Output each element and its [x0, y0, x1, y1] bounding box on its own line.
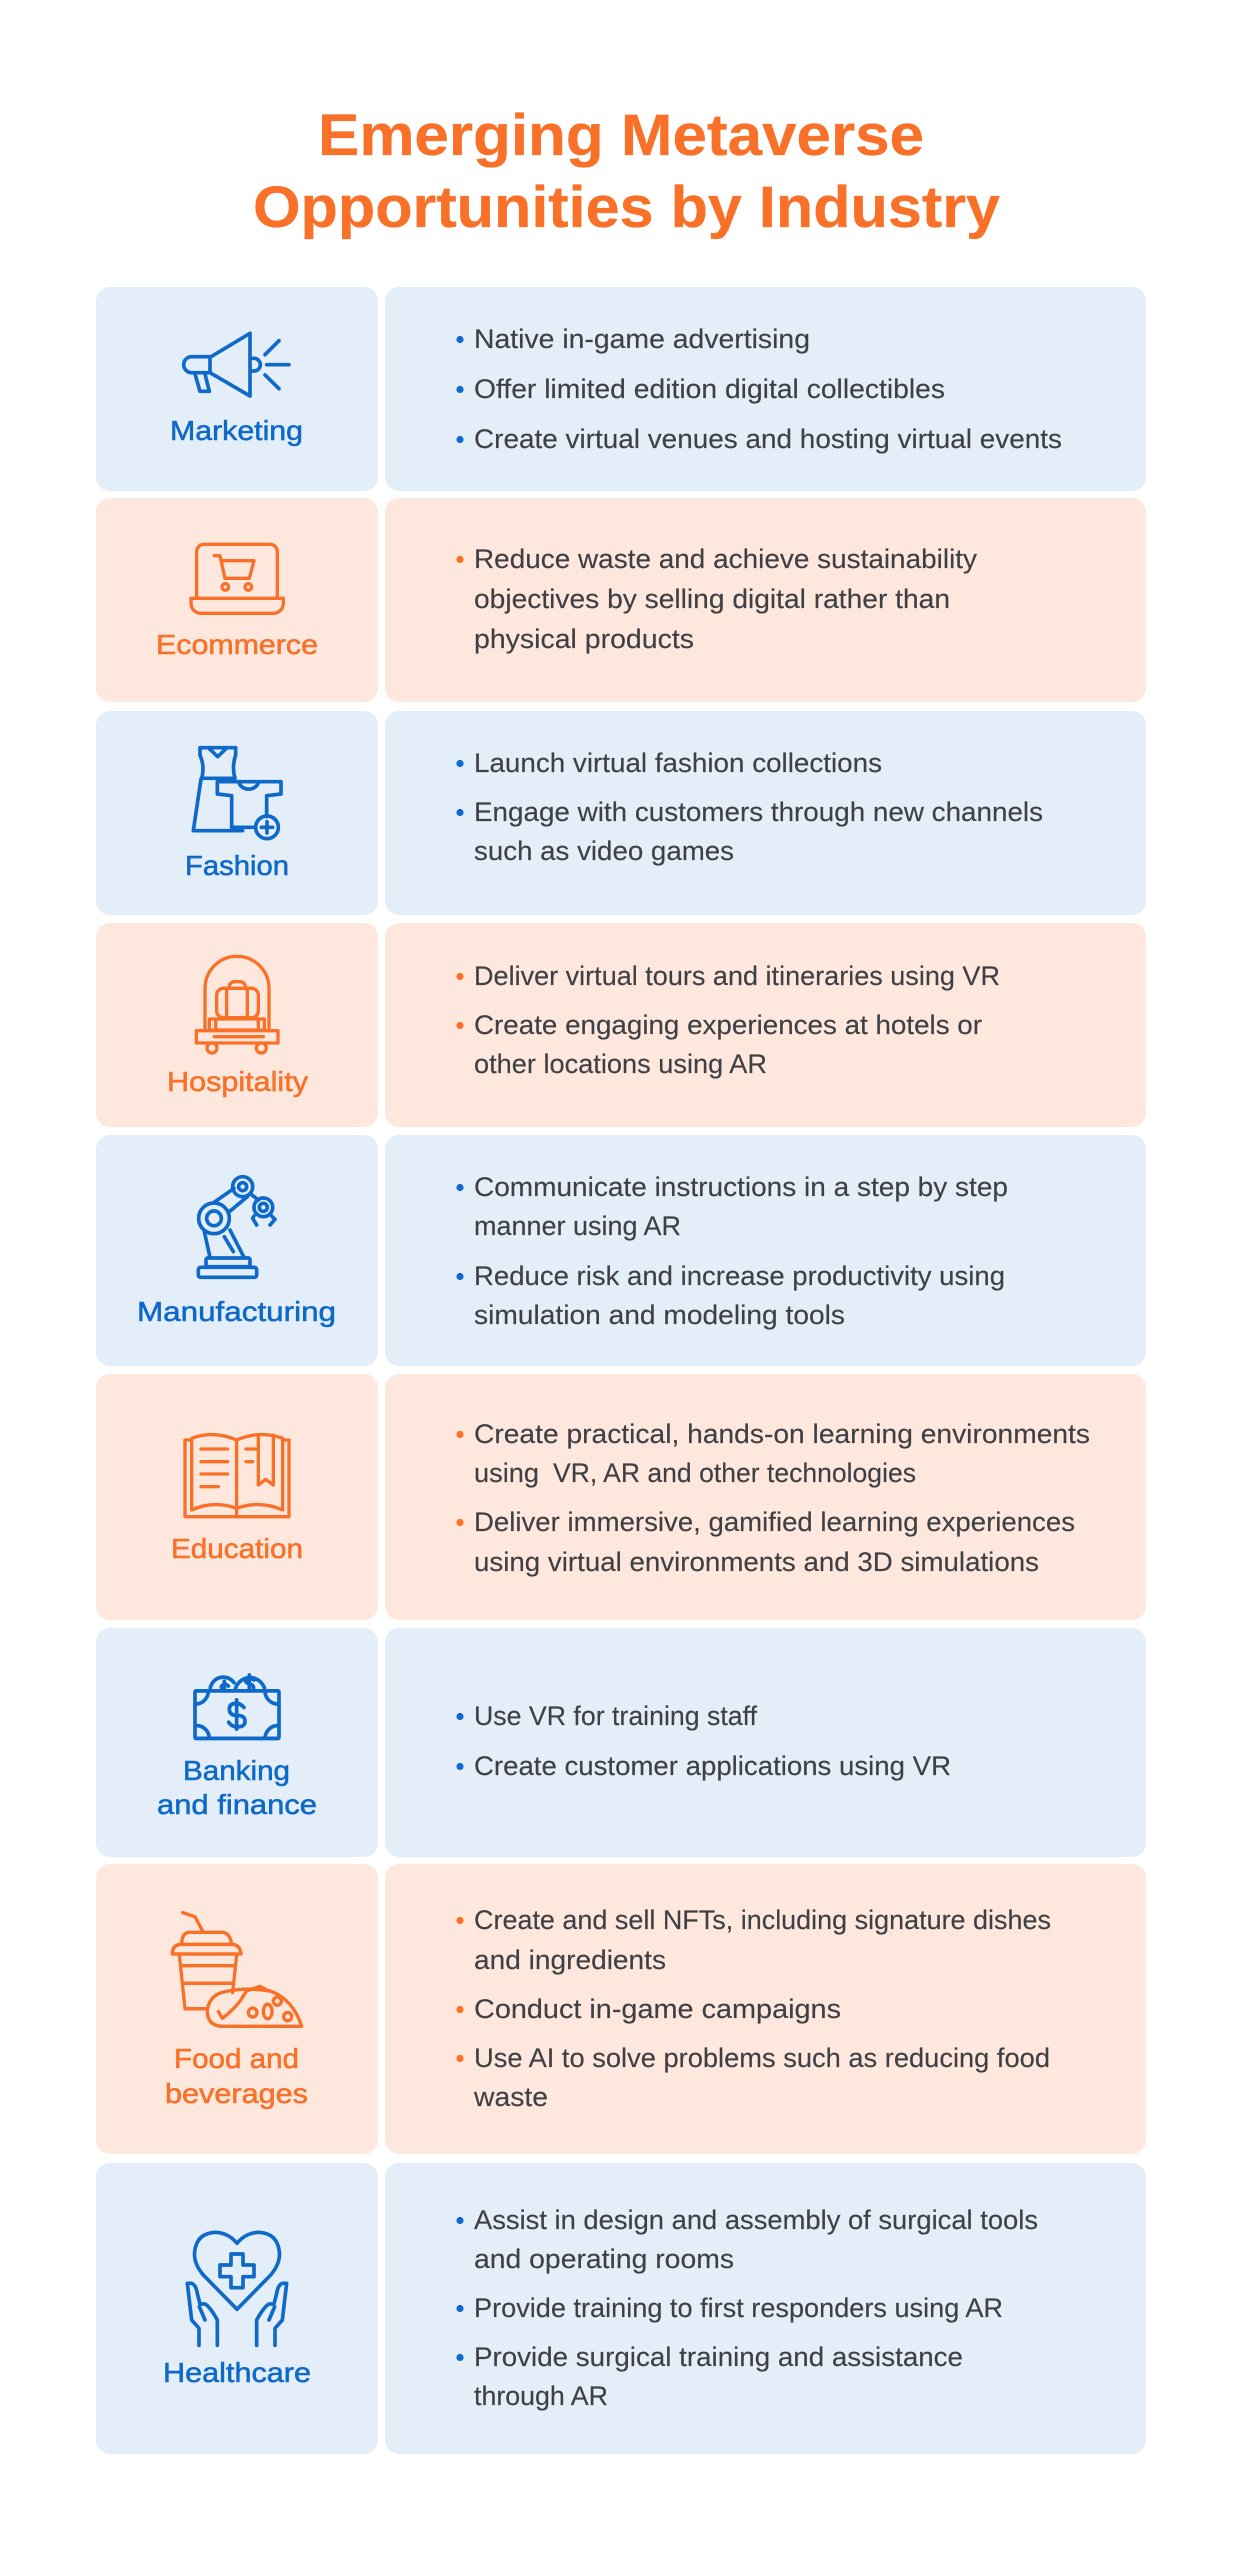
panel: healthcare label	[96, 2163, 378, 2454]
bullet: gamified learning: using virtual environments and 3D simulations	[474, 1547, 1039, 1577]
bullet: AI food waste: Use AI to solve problems such as reducing food	[474, 2043, 1050, 2073]
bullet: hands-on learning: VR, AR and other technologies	[553, 1458, 916, 1488]
panel: marketing label	[96, 287, 378, 491]
bullet: gamified learning	[456, 1507, 1075, 1577]
bullet: surgical tools	[456, 2205, 1038, 2274]
panel: ecommerce label	[96, 498, 378, 702]
icon: open book	[185, 1435, 289, 1517]
bullet: first responders: Provide training to first responders using AR	[474, 2293, 1003, 2323]
bullet: reduce waste: physical products	[474, 624, 694, 654]
bullet: reduce waste: Reduce waste and achieve sustainability	[474, 544, 978, 574]
bullet: reduce risk: simulation and modeling tools	[474, 1300, 845, 1330]
bullet: step by step instructions: Communicate instructions in a step by step	[474, 1172, 1008, 1202]
icon: drink cup and taco	[172, 1913, 302, 2026]
panel: banking label	[96, 1628, 378, 1857]
bullet: step by step instructions	[456, 1172, 1008, 1241]
label: Banking and finance: and finance	[157, 1789, 317, 1820]
panel: fashion label	[96, 711, 378, 915]
panel: food opportunities	[385, 1864, 1146, 2154]
panel: education label	[96, 1374, 378, 1620]
row: marketing	[96, 287, 1146, 491]
bullet: surgical training: Provide surgical training and assistance	[474, 2342, 963, 2372]
label: Hospitality: Hospitality	[167, 1066, 308, 1097]
bullet: virtual venues: Create virtual venues and hosting virtual events	[474, 424, 1062, 454]
bullet: in-game advertising: Native in-game advertising	[474, 324, 810, 354]
bullet: NFTs	[456, 1905, 1051, 1975]
bullet: surgical tools: Assist in design and assembly of surgical tools	[474, 2205, 1038, 2235]
bullet: AI food waste: waste	[473, 2082, 548, 2112]
panel: healthcare opportunities	[385, 2163, 1146, 2454]
bullet: gamified learning: Deliver immersive, gamified learning experiences	[474, 1507, 1075, 1537]
panel: hospitality opportunities	[385, 923, 1146, 1127]
bullet: reduce waste	[456, 544, 978, 654]
row: healthcare	[96, 2163, 1146, 2454]
icon: robot arm	[198, 1177, 275, 1277]
bullet: surgical training: through AR	[474, 2381, 608, 2411]
icon: megaphone	[184, 333, 289, 396]
icon: banknote and coins	[195, 1675, 279, 1738]
row: manufacturing	[96, 1135, 1146, 1366]
bullet: reduce risk: Reduce risk and increase productivity using	[474, 1261, 1005, 1291]
label: Banking and finance	[157, 1755, 317, 1820]
label: Marketing: Marketing	[170, 415, 303, 446]
bullet: reduce waste: objectives by selling digital rather than	[474, 584, 950, 614]
bullet: reduce risk	[456, 1261, 1005, 1330]
bullet: surgical tools: and operating rooms	[474, 2244, 734, 2274]
bullet: NFTs: and ingredients	[474, 1945, 666, 1975]
label: Education: Education	[171, 1533, 303, 1564]
icon: laptop with shopping cart	[191, 544, 283, 613]
panel: marketing opportunities	[385, 287, 1146, 491]
panel: manufacturing opportunities	[385, 1135, 1146, 1366]
bullet: engaging experiences: Create engaging experiences at hotels or	[474, 1010, 982, 1040]
bullet: new channels	[456, 797, 1043, 866]
bullet: engaging experiences	[456, 1010, 982, 1079]
row: fashion	[96, 711, 1146, 915]
bullet: hands-on learning	[456, 1419, 1090, 1488]
row: hospitality	[96, 923, 1146, 1127]
row: food and beverages	[96, 1864, 1146, 2154]
label: Banking and finance: Banking	[183, 1755, 290, 1786]
panel: fashion opportunities	[385, 711, 1146, 915]
label: Food and beverages: beverages	[165, 2078, 308, 2109]
row: education	[96, 1374, 1146, 1620]
panel: hospitality label	[96, 923, 378, 1127]
label: Food and beverages	[165, 2043, 308, 2109]
bullet: hands-on learning: Create practical, hands-on learning environments	[474, 1419, 1090, 1449]
bullet: in-game campaigns: Conduct in-game campaigns	[474, 1994, 841, 2024]
bullet: hands-on learning: using	[474, 1458, 539, 1488]
label: Food and beverages: Food and	[174, 2043, 299, 2074]
label: Fashion: Fashion	[185, 850, 289, 881]
title: Opportunities by Industry	[253, 175, 1000, 240]
icon: hands holding heart	[187, 2232, 287, 2345]
panel: food label	[96, 1864, 378, 2154]
row: ecommerce	[96, 498, 1146, 702]
label: Healthcare: Healthcare	[163, 2357, 311, 2388]
bullet: new channels: Engage with customers through new channels	[474, 797, 1043, 827]
icon: luggage cart	[196, 956, 278, 1053]
bullet: VR staff training: Use VR for training staff	[474, 1701, 757, 1731]
panel: ecommerce opportunities	[385, 498, 1146, 702]
bullet: new channels: such as video games	[474, 836, 734, 866]
title: Emerging Metaverse	[318, 103, 924, 168]
bullet: NFTs: Create and sell NFTs, including signature dishes	[474, 1905, 1051, 1935]
label: Ecommerce: Ecommerce	[156, 629, 318, 660]
bullet: customer applications: Create customer applications using VR	[474, 1751, 951, 1781]
panel: manufacturing label	[96, 1135, 378, 1366]
icon: dress and shirt	[193, 748, 281, 839]
bullet: engaging experiences: other locations using AR	[474, 1049, 767, 1079]
label: Manufacturing: Manufacturing	[137, 1296, 336, 1327]
bullet: step by step instructions: manner using AR	[474, 1211, 681, 1241]
panel: education opportunities	[385, 1374, 1146, 1620]
title	[253, 103, 1000, 240]
bullet: digital collectibles: Offer limited edition digital collectibles	[474, 374, 945, 404]
row: banking and finance	[96, 1628, 1146, 1857]
bullet: fashion collections: Launch virtual fashion collections	[474, 748, 882, 778]
panel: banking opportunities	[385, 1628, 1146, 1857]
bullet: AI food waste	[456, 2043, 1050, 2112]
bullet: surgical training	[456, 2342, 963, 2411]
bullet: virtual tours: Deliver virtual tours and itineraries using VR	[474, 961, 1000, 991]
